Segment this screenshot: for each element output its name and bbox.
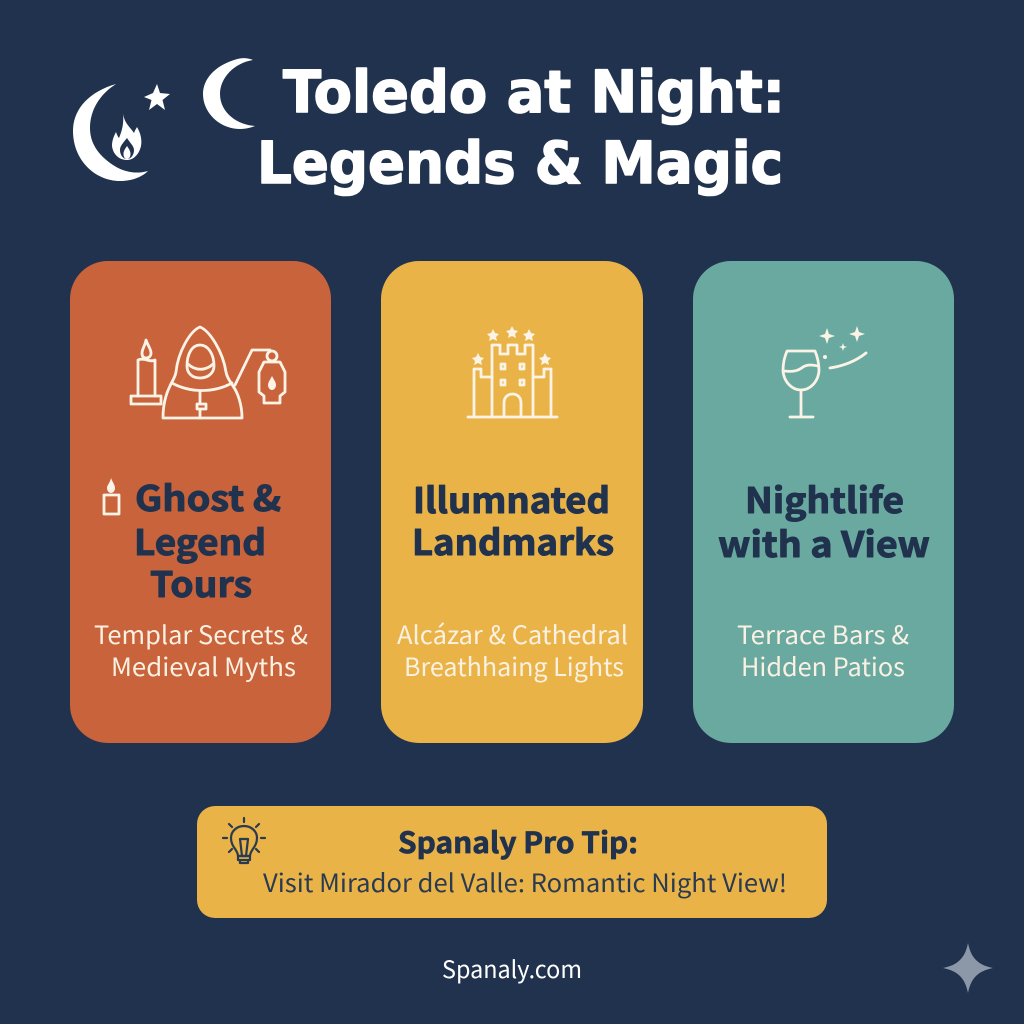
icon: castle with stars bbox=[468, 326, 557, 417]
icon: light bulb bbox=[223, 818, 265, 863]
icon: hooded figure with candle and lantern bbox=[131, 327, 285, 418]
icon: title crescent moon bbox=[203, 58, 255, 129]
heading: Ghost & bbox=[135, 471, 281, 522]
description bbox=[737, 616, 909, 684]
heading bbox=[718, 473, 930, 568]
panel: ghost and legend tours bbox=[70, 261, 331, 743]
tip text: Visit Mirador del Valle: Romantic Night View! bbox=[263, 864, 787, 900]
heading: Illumnated bbox=[413, 473, 610, 524]
heading bbox=[134, 471, 281, 608]
icon: small candle bbox=[104, 478, 119, 514]
description: Breathhaing Lights bbox=[404, 648, 624, 684]
icon: four-point sparkle bbox=[943, 943, 993, 993]
icon: crescent moon with flame and star bbox=[73, 84, 170, 181]
panel: illuminated landmarks bbox=[381, 261, 643, 743]
description bbox=[94, 616, 308, 684]
callout: pro tip bbox=[197, 806, 827, 918]
heading: Tours bbox=[150, 557, 252, 608]
tip heading: Spanaly Pro Tip: bbox=[398, 820, 638, 862]
description bbox=[397, 616, 628, 684]
description: Terrace Bars & bbox=[737, 616, 909, 652]
icon: wine glass with sparkles bbox=[783, 326, 866, 417]
description: Alcázar & Cathedral bbox=[397, 616, 628, 652]
description: Templar Secrets & bbox=[94, 616, 308, 652]
footer website: Spanaly.com bbox=[442, 950, 582, 985]
description: Medieval Myths bbox=[111, 648, 296, 684]
heading: Legend bbox=[134, 515, 266, 566]
heading bbox=[412, 473, 614, 566]
title: Legends & Magic bbox=[257, 129, 783, 197]
description: Hidden Patios bbox=[741, 648, 905, 684]
panel: nightlife with a view bbox=[693, 261, 954, 743]
heading: with a View bbox=[718, 517, 930, 568]
heading: Nightlife bbox=[745, 473, 904, 524]
title: Toledo at Night: bbox=[283, 58, 785, 126]
heading: Landmarks bbox=[412, 515, 614, 566]
title bbox=[257, 58, 785, 197]
